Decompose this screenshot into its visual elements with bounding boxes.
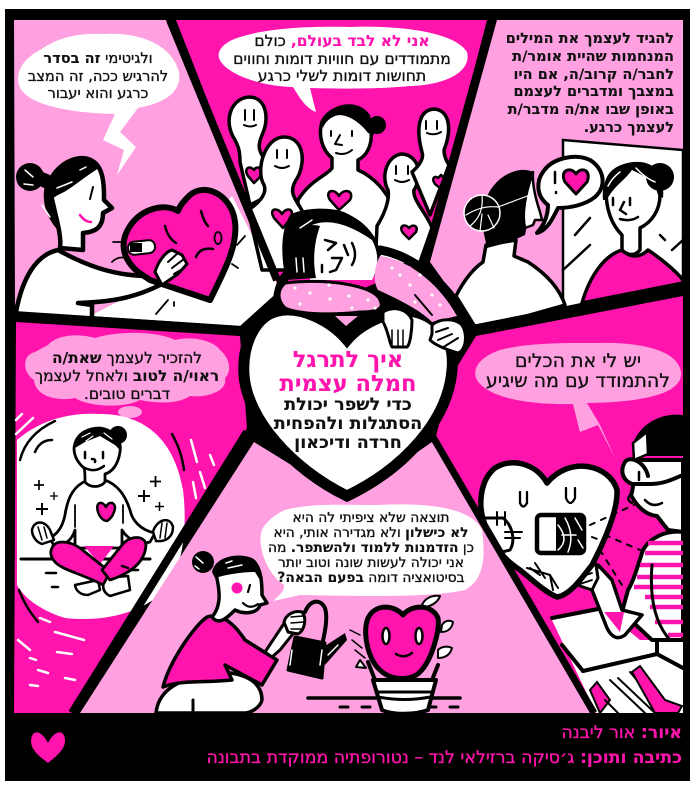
panel: it is okay (top left): [14, 20, 280, 326]
woman in mirror: [563, 162, 683, 303]
panel: learning from failure (bottom): [80, 442, 590, 714]
speech bubble: it is okay: להרגיש ככה, זה המצב: [28, 68, 168, 85]
thought bubble: remind yourself: דברים טובים.: [84, 385, 170, 403]
thought bubble: remind yourself: להזכיר לעצמך שאת/ה: [52, 349, 202, 367]
title: כדי לשפר יכולת: [284, 395, 412, 415]
icon: crying bandaged heart: [112, 190, 245, 314]
sleeping figure hugging heart: [278, 209, 465, 353]
speech bubble: tools: להתמודד עם מה שיגיע: [486, 370, 670, 392]
speech bubble: it is okay: ולגיטימי זה בסדר: [43, 50, 153, 67]
speech bubble: learning: בסיטואציה דומה בפעם הבאה?: [277, 570, 465, 586]
speech bubble: not alone: אני לא לבד בעולם, כולם: [254, 32, 430, 50]
speech bubble: not alone: [219, 27, 468, 112]
title: חמלה עצמית: [279, 371, 417, 397]
white speed marks: [16, 414, 214, 686]
text: words of comfort: [506, 31, 674, 136]
credits: [206, 723, 682, 768]
patched heart with magnifier: [481, 463, 640, 597]
speech bubble: it is okay: כרגע והוא יעבור: [48, 85, 148, 102]
tools table: [552, 608, 683, 713]
text: words of comfort: לחבר/ה קרוב/ה, אם היו: [513, 67, 674, 83]
watering can: [288, 602, 365, 678]
mirror: [563, 140, 683, 308]
woman facing mirror: [456, 170, 565, 330]
text: words of comfort: במצבך ומדברים לעצמם: [513, 84, 674, 100]
title: הסתגלות ולהפחית: [274, 414, 422, 434]
meditation bubble: [17, 414, 185, 622]
panel: not alone (top center): [176, 20, 487, 290]
thought bubble: remind yourself: [25, 333, 229, 424]
title: איך לתרגל: [293, 347, 403, 373]
speech bubble: not alone: תחושות דומות לשלי כרגע: [258, 67, 426, 85]
figures: [229, 97, 449, 270]
speech bubble: not alone: מתמודדים עם חוויות דומות וחווים: [233, 50, 451, 68]
title: חרדה ודיכאון: [294, 433, 402, 453]
icon: heart plant: [308, 596, 462, 714]
thought bubble: remind yourself: ראוי/ה לטוב ולאחל לעצמך: [35, 367, 219, 385]
icon: heart speech bubble: [537, 157, 603, 233]
speech bubble: learning: תוצאה שלא ציפיתי לה היא: [293, 510, 449, 526]
meditating woman: [21, 426, 173, 596]
speech bubble: learning: [261, 504, 484, 601]
person with glasses: [572, 415, 683, 640]
text: words of comfort: להגיד לעצמך את המילים: [506, 31, 674, 47]
woman watering: [156, 551, 305, 713]
text: words of comfort: לעצמך כרגע.: [584, 120, 674, 136]
speech bubble: learning: כן הזדמנות ללמוד ולהשתפר. מה: [268, 540, 474, 556]
text: words of comfort: באופן שבו את/ה מדבר/ת: [508, 102, 674, 118]
icon: footer heart: [31, 732, 65, 763]
footer: [31, 723, 682, 768]
speech bubble: tools: [475, 343, 681, 458]
woman comforting heart: [16, 156, 160, 318]
panel: words of comfort (top right): [430, 20, 683, 330]
panel: coping tools (right): [436, 296, 683, 713]
center heart with title: [244, 209, 465, 496]
panel: self kindness (left): [14, 322, 247, 713]
text: words of comfort: המנחמות שהיית אומר/ת: [512, 49, 674, 65]
speech bubble: tools: יש לי את הכלים: [515, 350, 641, 372]
speech bubble: learning: לא כישלון ולא מגדירה אותי, היא: [273, 525, 469, 541]
credits: כתיבה ותוכן: ג׳סיקה ברזילאי לנד – נטורופתיה ממוקדת בתבונה: [206, 748, 682, 768]
speech bubble: it is okay: [18, 34, 179, 175]
speech bubble: learning: אני יכולה לעשות שונה וטוב יותר: [278, 555, 464, 571]
credits: איור: אור ליבנה: [561, 723, 682, 743]
title: [274, 347, 422, 453]
